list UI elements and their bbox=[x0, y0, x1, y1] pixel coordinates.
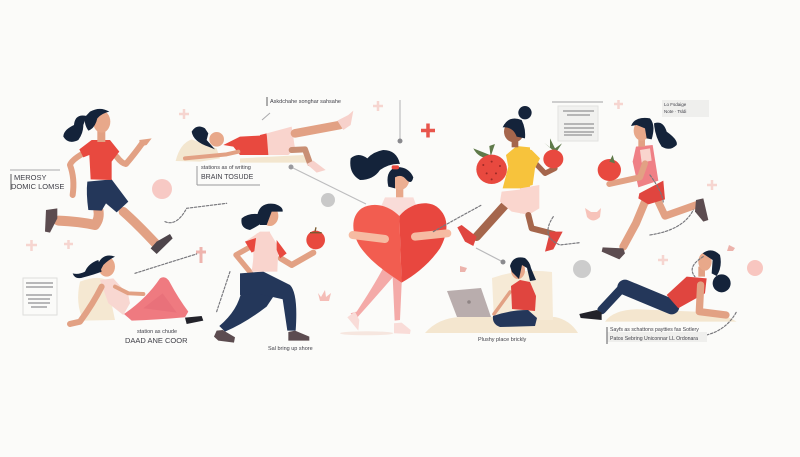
icon: grey circle, lower right bbox=[573, 260, 591, 278]
label: bottom right caption: Patos Sebring Uniconnar LL Ordonara bbox=[610, 336, 698, 342]
label: bottom left caption: DAAD ANE COOR bbox=[125, 336, 188, 345]
laptop bbox=[447, 288, 491, 317]
label: lunge caption: Sal bring up shore bbox=[268, 346, 313, 352]
label: brain caption: stations as of writing bbox=[201, 165, 251, 171]
figure: woman reclining on cushion, bottom left bbox=[70, 256, 203, 324]
label: brain caption: BRAIN TOSUDE bbox=[201, 174, 254, 181]
icon: small bug marks bbox=[196, 247, 206, 263]
connector lines and dashed trails bbox=[135, 100, 737, 335]
figure: woman running with apple, top right bbox=[598, 118, 708, 259]
figure: woman lying with leg raised bbox=[176, 111, 353, 173]
icon: grey circle, centre bbox=[321, 193, 335, 207]
label: memory, top left bbox=[10, 170, 64, 191]
label: memory, top left: MEROSY bbox=[14, 173, 47, 182]
icon: pink circle, left bbox=[152, 179, 172, 199]
label: memory, top left: DOMIC LOMSE bbox=[11, 182, 64, 191]
icon: small bow bbox=[460, 245, 735, 272]
figure: woman lunging with apple bbox=[214, 204, 325, 343]
label: bottom right caption bbox=[607, 327, 707, 344]
mat bbox=[425, 317, 578, 333]
label: top centre caption bbox=[267, 97, 341, 106]
label: laptop caption: Plushy place brickly bbox=[478, 337, 527, 343]
info box: top right centre bbox=[552, 102, 603, 141]
icon: red plus bbox=[421, 124, 435, 138]
label: bottom left caption: station as chude bbox=[137, 329, 177, 335]
label: top centre caption: Askdchahe songhar sahsahe bbox=[270, 99, 341, 105]
tank top bbox=[511, 280, 536, 311]
figure: woman reclining on mat, bottom right bbox=[579, 250, 737, 322]
icon: pink flower bbox=[318, 290, 331, 301]
figure: woman with laptop bbox=[425, 257, 578, 333]
label: bottom right caption: Sayfs as schattons paytties fas Sotlery bbox=[610, 327, 699, 333]
figure: central woman hugging heart bbox=[340, 150, 447, 335]
icon: pink circle, right bbox=[747, 260, 763, 276]
info box: top right bbox=[662, 100, 709, 117]
info box: top right: Lo Fsdaige bbox=[664, 102, 687, 107]
label: bottom left caption bbox=[125, 329, 188, 345]
icon: pale plus marks bbox=[26, 100, 717, 265]
figure: woman running, top left bbox=[45, 109, 173, 254]
figure: woman running with strawberries bbox=[457, 106, 563, 252]
icon: cat face bbox=[585, 208, 601, 220]
decorative icons and dots bbox=[26, 100, 763, 301]
info box: top right: Note · Tsldi bbox=[664, 109, 686, 114]
arm bbox=[494, 292, 510, 314]
head bbox=[511, 261, 525, 279]
info box: left bbox=[23, 278, 57, 315]
label: brain caption bbox=[197, 165, 260, 185]
crossed legs bbox=[493, 310, 537, 327]
cushion bbox=[492, 271, 553, 320]
